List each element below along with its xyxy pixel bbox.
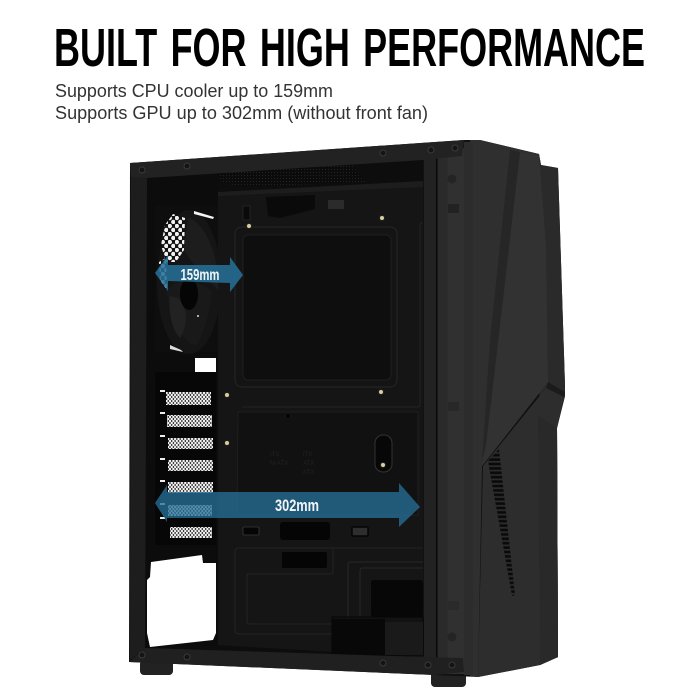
embossed tray markings: ATX (303, 470, 314, 476)
lower front facet (478, 388, 564, 677)
white highlight (194, 211, 214, 219)
embossed tray markings: ITX (270, 452, 279, 458)
gold standoffs (224, 216, 386, 468)
PSU bay (332, 617, 423, 655)
side pillars (424, 142, 473, 675)
expansion slot bracket (155, 372, 216, 545)
subtitle line 1: CPU cooler support: Supports CPU cooler up to 159mm (55, 81, 333, 101)
embossed tray markings: M-ATX (270, 461, 288, 467)
embossed tray markings: ATX (303, 461, 314, 467)
cable routing cutouts (243, 522, 368, 568)
label: 302mm: 302mm (275, 496, 319, 515)
ceiling mesh (193, 163, 367, 187)
bottom frame (129, 648, 464, 675)
PC case illustration (129, 140, 565, 687)
case feet (140, 660, 466, 687)
cable oval grommet (375, 435, 392, 472)
lower facet shade (538, 415, 558, 665)
lower tray panel (237, 412, 418, 515)
dark diagonal stripe (482, 150, 520, 462)
white PSU opening (147, 555, 216, 647)
rear fan (155, 206, 221, 354)
frame screws (139, 145, 458, 668)
embossed tray markings (270, 452, 314, 476)
fan guard holes (161, 214, 185, 262)
angled dark tip (546, 382, 565, 397)
front panel (470, 140, 565, 677)
interior back (145, 160, 423, 657)
pillar clips (448, 204, 459, 213)
subtitle line 2: GPU support: Supports GPU up to 302mm (without front fan) (55, 103, 428, 123)
left pillar (130, 165, 147, 660)
embossed tray markings: ITX (303, 452, 312, 458)
case silhouette (129, 140, 565, 677)
fan blades (184, 218, 218, 290)
pillar screws (448, 174, 456, 184)
upper front facet (470, 140, 548, 677)
rear left interior (145, 173, 218, 648)
side vent (488, 449, 515, 596)
front right side strip (539, 154, 565, 665)
top rail (218, 181, 423, 198)
CPU cutout (235, 227, 397, 387)
top frame (130, 140, 464, 178)
cable tab cutout (266, 195, 315, 218)
arrow: 159mm CPU cooler clearance (155, 255, 243, 292)
motherboard tray (216, 187, 423, 657)
upper facet highlight (482, 152, 548, 466)
white exhaust opening (195, 358, 216, 387)
arrow: 302mm GPU clearance (155, 483, 420, 527)
label: 159mm: 159mm (180, 267, 220, 284)
PSU shroud (235, 548, 423, 634)
tray step lines (242, 223, 423, 407)
